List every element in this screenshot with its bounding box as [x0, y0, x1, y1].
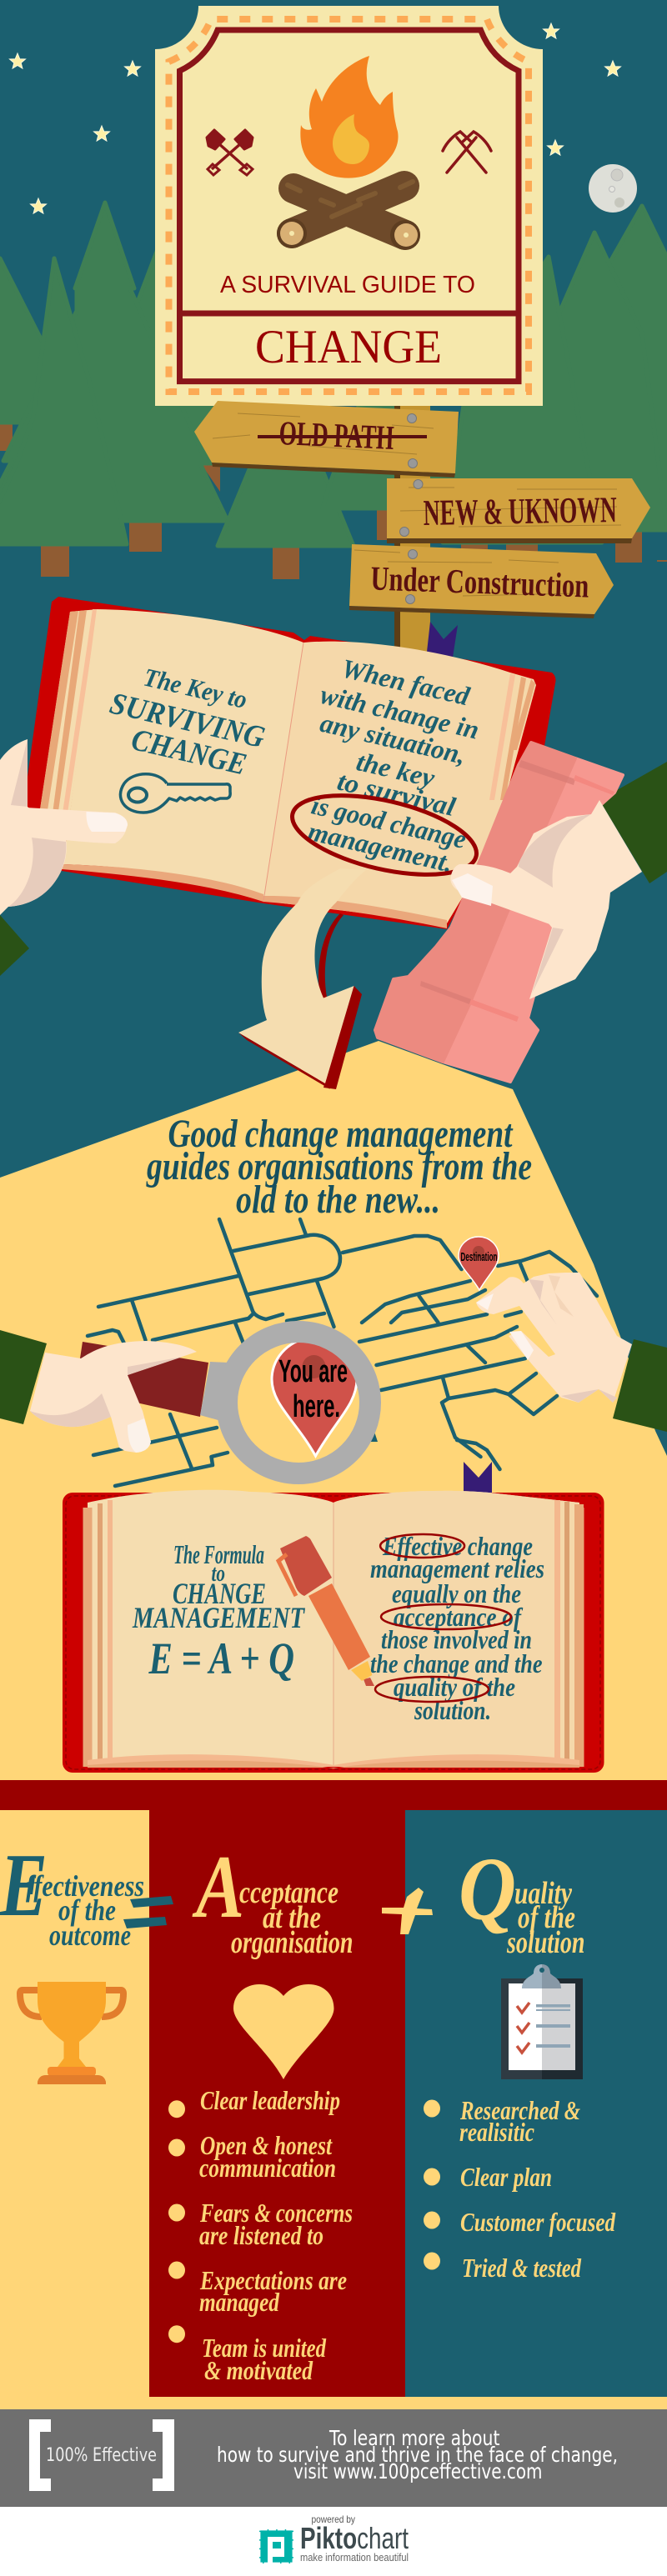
sign: under construction	[349, 544, 614, 618]
left page text: E = A + Q	[148, 1633, 294, 1683]
plus sign	[382, 1888, 433, 1934]
footer call to action	[217, 2426, 618, 2483]
effectiveness heading	[0, 1836, 144, 1952]
acceptance bullet list: communication	[199, 2153, 336, 2183]
open book: the formula	[63, 1490, 604, 1773]
piktochart logo mark	[259, 2529, 293, 2563]
left page text: The Key to	[141, 663, 250, 714]
white page bottom	[0, 2507, 667, 2576]
quality bullet list: Researched &	[459, 2095, 580, 2125]
destination pin	[459, 1237, 499, 1290]
quality heading: solution	[506, 1925, 585, 1960]
left page text: The Formula	[173, 1539, 264, 1569]
effectiveness heading: ffectiveness	[26, 1869, 144, 1903]
palm	[509, 800, 642, 999]
quality heading: uality	[514, 1876, 572, 1911]
acceptance heading: organisation	[231, 1925, 354, 1960]
right page text: to survival	[334, 766, 459, 822]
subtitle: A SURVIVAL GUIDE TO	[220, 272, 475, 298]
left page text	[107, 663, 268, 783]
icon: clipboard checklist	[501, 1964, 583, 2079]
acceptance bullet list	[168, 2085, 353, 2385]
icon: marker pen	[278, 1536, 374, 1686]
quality bullet list: realisitic	[459, 2117, 534, 2147]
quality bullet list	[424, 2095, 616, 2283]
left page text	[132, 1539, 306, 1683]
effectiveness heading: outcome	[49, 1918, 131, 1952]
magnifying glass with you are here pin: You are	[278, 1354, 348, 1389]
quality bullet list: Customer focused	[460, 2207, 616, 2237]
acceptance bullet list: Team is united	[202, 2333, 327, 2363]
heading: old to the new: guides organisations from the	[146, 1144, 532, 1188]
signpost	[394, 388, 430, 658]
title badge	[155, 6, 543, 406]
acceptance heading: A	[192, 1838, 244, 1937]
left page text: CHANGE	[173, 1577, 266, 1610]
acceptance heading: cceptance	[239, 1875, 339, 1910]
equals sign	[123, 1896, 173, 1928]
quality bullet list: Clear plan	[460, 2162, 552, 2192]
yellow spotlight background	[0, 1041, 667, 2409]
magnifying glass with you are here pin	[80, 1332, 370, 1473]
destination pin: Destination	[460, 1250, 497, 1264]
icon: trophy	[20, 1982, 123, 2084]
bookmark ribbon	[464, 1462, 492, 1494]
heading: old to the new	[146, 1112, 532, 1222]
right page text: management relies	[370, 1553, 544, 1583]
left page text: SURVIVING	[107, 687, 268, 755]
pink cuff	[375, 743, 623, 1082]
acceptance bullet list: Open & honest	[200, 2130, 333, 2160]
acceptance heading: at the	[263, 1900, 321, 1935]
heading: old to the new: Good change management	[168, 1112, 514, 1156]
panel: acceptance	[149, 1810, 405, 2397]
powered by piktochart: powered by	[312, 2513, 355, 2525]
right page text: equally on the	[392, 1578, 521, 1608]
icon: crossed pickaxes	[443, 132, 491, 173]
right page text: is good change	[308, 789, 469, 854]
logo: 100% effective brackets: 100% Effective	[46, 2445, 157, 2466]
effectiveness heading: E	[0, 1836, 48, 1935]
quality heading	[459, 1840, 585, 1960]
powered by piktochart: make information beautiful	[300, 2552, 409, 2563]
quality bullet list: Tried & tested	[462, 2253, 582, 2283]
sign: old path: OLD PATH	[278, 413, 395, 457]
right page text: quality of the	[394, 1672, 515, 1702]
acceptance bullet list: managed	[199, 2287, 280, 2317]
acceptance heading	[192, 1838, 354, 1960]
quality heading: of the	[518, 1900, 575, 1935]
left hand holding book	[0, 739, 128, 976]
effectiveness heading: of the	[58, 1893, 116, 1927]
left page text: CHANGE	[128, 723, 249, 783]
acceptance bullet list: & motivated	[204, 2355, 313, 2385]
footer band	[0, 2409, 667, 2507]
right page text: Effective change	[382, 1531, 533, 1561]
circled key words	[375, 1534, 511, 1702]
forest of pine trees	[0, 108, 667, 579]
right page text: those involved in	[381, 1624, 532, 1654]
quality heading: Q	[459, 1840, 516, 1939]
acceptance bullet list: Expectations are	[199, 2265, 347, 2295]
icon: crossed shovels	[207, 130, 253, 175]
footer call to action: visit www.100pceffective.com	[293, 2459, 542, 2483]
left page text: to	[212, 1561, 225, 1587]
right page text: acceptance of	[394, 1602, 524, 1632]
right page text: any situation,	[318, 708, 469, 770]
panel: quality	[405, 1810, 667, 2397]
sign: old path	[194, 401, 459, 478]
right page text: with change in	[318, 679, 482, 745]
stars	[10, 23, 620, 213]
right page text: management.	[305, 816, 456, 878]
moon	[589, 164, 637, 213]
icon: heart	[233, 1984, 334, 2079]
thumb	[450, 864, 564, 929]
road map	[88, 1219, 597, 1486]
right page text: solution.	[414, 1695, 491, 1725]
right page text	[370, 1531, 544, 1725]
logo: 100% effective brackets	[29, 2419, 174, 2491]
arrow pointing down	[238, 868, 366, 1089]
bookmark ribbon	[427, 622, 458, 658]
right page text: the change and the	[370, 1648, 542, 1678]
icon: key	[120, 774, 230, 813]
heading: old to the new: old to the new...	[236, 1178, 440, 1222]
dark red band	[0, 1780, 667, 1810]
sign: under construction: Under Construction	[370, 558, 589, 605]
acceptance bullet list: Fears & concerns	[199, 2198, 353, 2228]
powered by piktochart	[259, 2513, 409, 2563]
right page text: When faced	[339, 653, 473, 712]
open book: the key	[17, 597, 555, 929]
footer call to action: To learn more about	[328, 2426, 500, 2450]
hand-drawn circle highlight	[285, 781, 484, 889]
hand pointing at destination	[476, 1273, 667, 1432]
location pin	[272, 1338, 357, 1456]
icon: campfire	[277, 56, 420, 250]
acceptance bullet list: Clear leadership	[200, 2085, 340, 2115]
green sleeve	[599, 762, 667, 883]
right page text: the key	[354, 746, 439, 793]
panel: effectiveness	[0, 1810, 149, 2409]
main title: CHANGE	[255, 321, 442, 373]
sign: new and unknown	[387, 478, 650, 543]
right hand holding book	[375, 743, 667, 1082]
powered by piktochart: Piktochart	[300, 2521, 409, 2555]
left page text: MANAGEMENT	[132, 1601, 306, 1634]
magnifying glass with you are here pin: here.	[293, 1389, 340, 1424]
right page text	[305, 653, 482, 878]
hand holding magnifier	[0, 1330, 197, 1453]
acceptance bullet list: are listened to	[199, 2220, 323, 2250]
